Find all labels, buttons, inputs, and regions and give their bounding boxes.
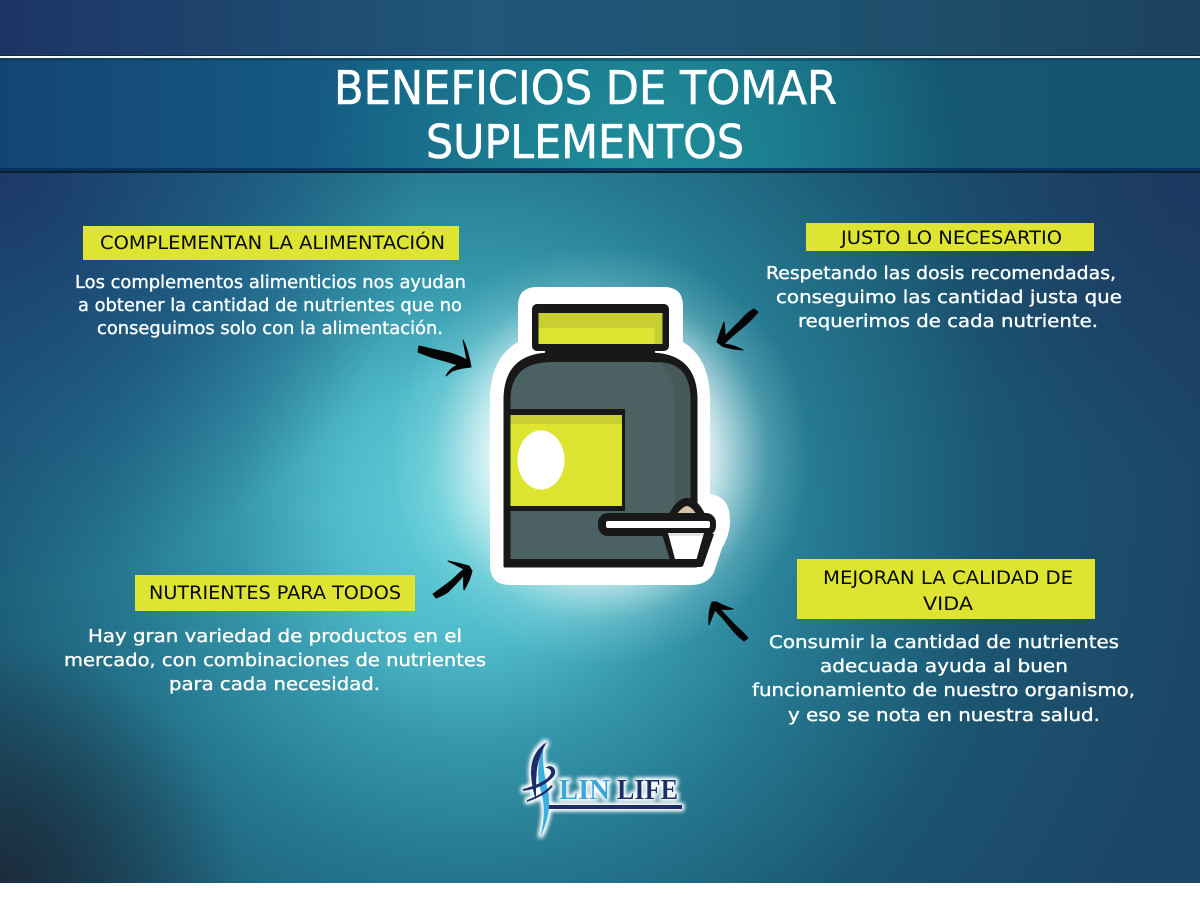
title <box>334 61 837 169</box>
body text: adecuada ayuda al buen <box>820 656 1068 677</box>
body text: mercado, con combinaciones de nutrientes <box>64 650 486 671</box>
heading box: VIDA <box>923 594 973 615</box>
title: BENEFICIOS DE TOMAR <box>334 61 837 115</box>
logo mark <box>523 741 555 837</box>
body text: conseguimo las cantidad justa que <box>776 287 1122 308</box>
heading box <box>797 559 1095 619</box>
heading box: NUTRIENTES PARA TODOS <box>149 583 401 604</box>
body text: Hay gran variedad de productos en el <box>88 626 462 647</box>
heading box <box>806 223 1094 251</box>
footer strip <box>0 883 1200 900</box>
body text: funcionamiento de nuestro organismo, <box>752 680 1135 701</box>
heading box <box>83 226 459 260</box>
body text <box>75 272 466 339</box>
logo: Lin Life <box>523 741 682 837</box>
body text <box>752 632 1135 726</box>
logo wordmark: LIN <box>559 775 610 806</box>
body text: y eso se nota en nuestra salud. <box>788 705 1100 726</box>
body text: conseguimos solo con la alimentación. <box>97 318 443 339</box>
heading box: MEJORAN LA CALIDAD DE <box>823 568 1073 589</box>
arrow: top right <box>717 309 758 350</box>
panel: nutrientes para todos <box>64 575 486 695</box>
panel: mejoran la calidad de vida <box>752 559 1135 726</box>
panel: justo lo necesario <box>766 223 1122 332</box>
panel: complementan la alimentación <box>75 226 466 339</box>
title band <box>0 55 1200 173</box>
icon: supplement jar with scoop <box>490 287 730 585</box>
logo wordmark <box>559 775 678 806</box>
arrow: bottom left <box>433 561 472 598</box>
body text: para cada necesidad. <box>169 674 380 695</box>
body text: Respetando las dosis recomendadas, <box>766 263 1116 284</box>
body text: requerimos de cada nutriente. <box>798 311 1098 332</box>
body text <box>64 626 486 695</box>
arrow: top left <box>418 340 471 376</box>
body text: Los complementos alimenticios nos ayudan <box>75 272 466 293</box>
heading box: JUSTO LO NECESARTIO <box>840 228 1062 249</box>
title: SUPLEMENTOS <box>426 115 744 169</box>
body text <box>766 263 1122 332</box>
arrow: bottom right <box>709 602 748 641</box>
logo wordmark: LIFE <box>617 775 678 806</box>
body text: Consumir la cantidad de nutrientes <box>769 632 1119 653</box>
heading box: COMPLEMENTAN LA ALIMENTACIÓN <box>100 232 445 254</box>
body text: a obtener la cantidad de nutrientes que no <box>78 295 462 316</box>
heading box <box>135 575 415 611</box>
